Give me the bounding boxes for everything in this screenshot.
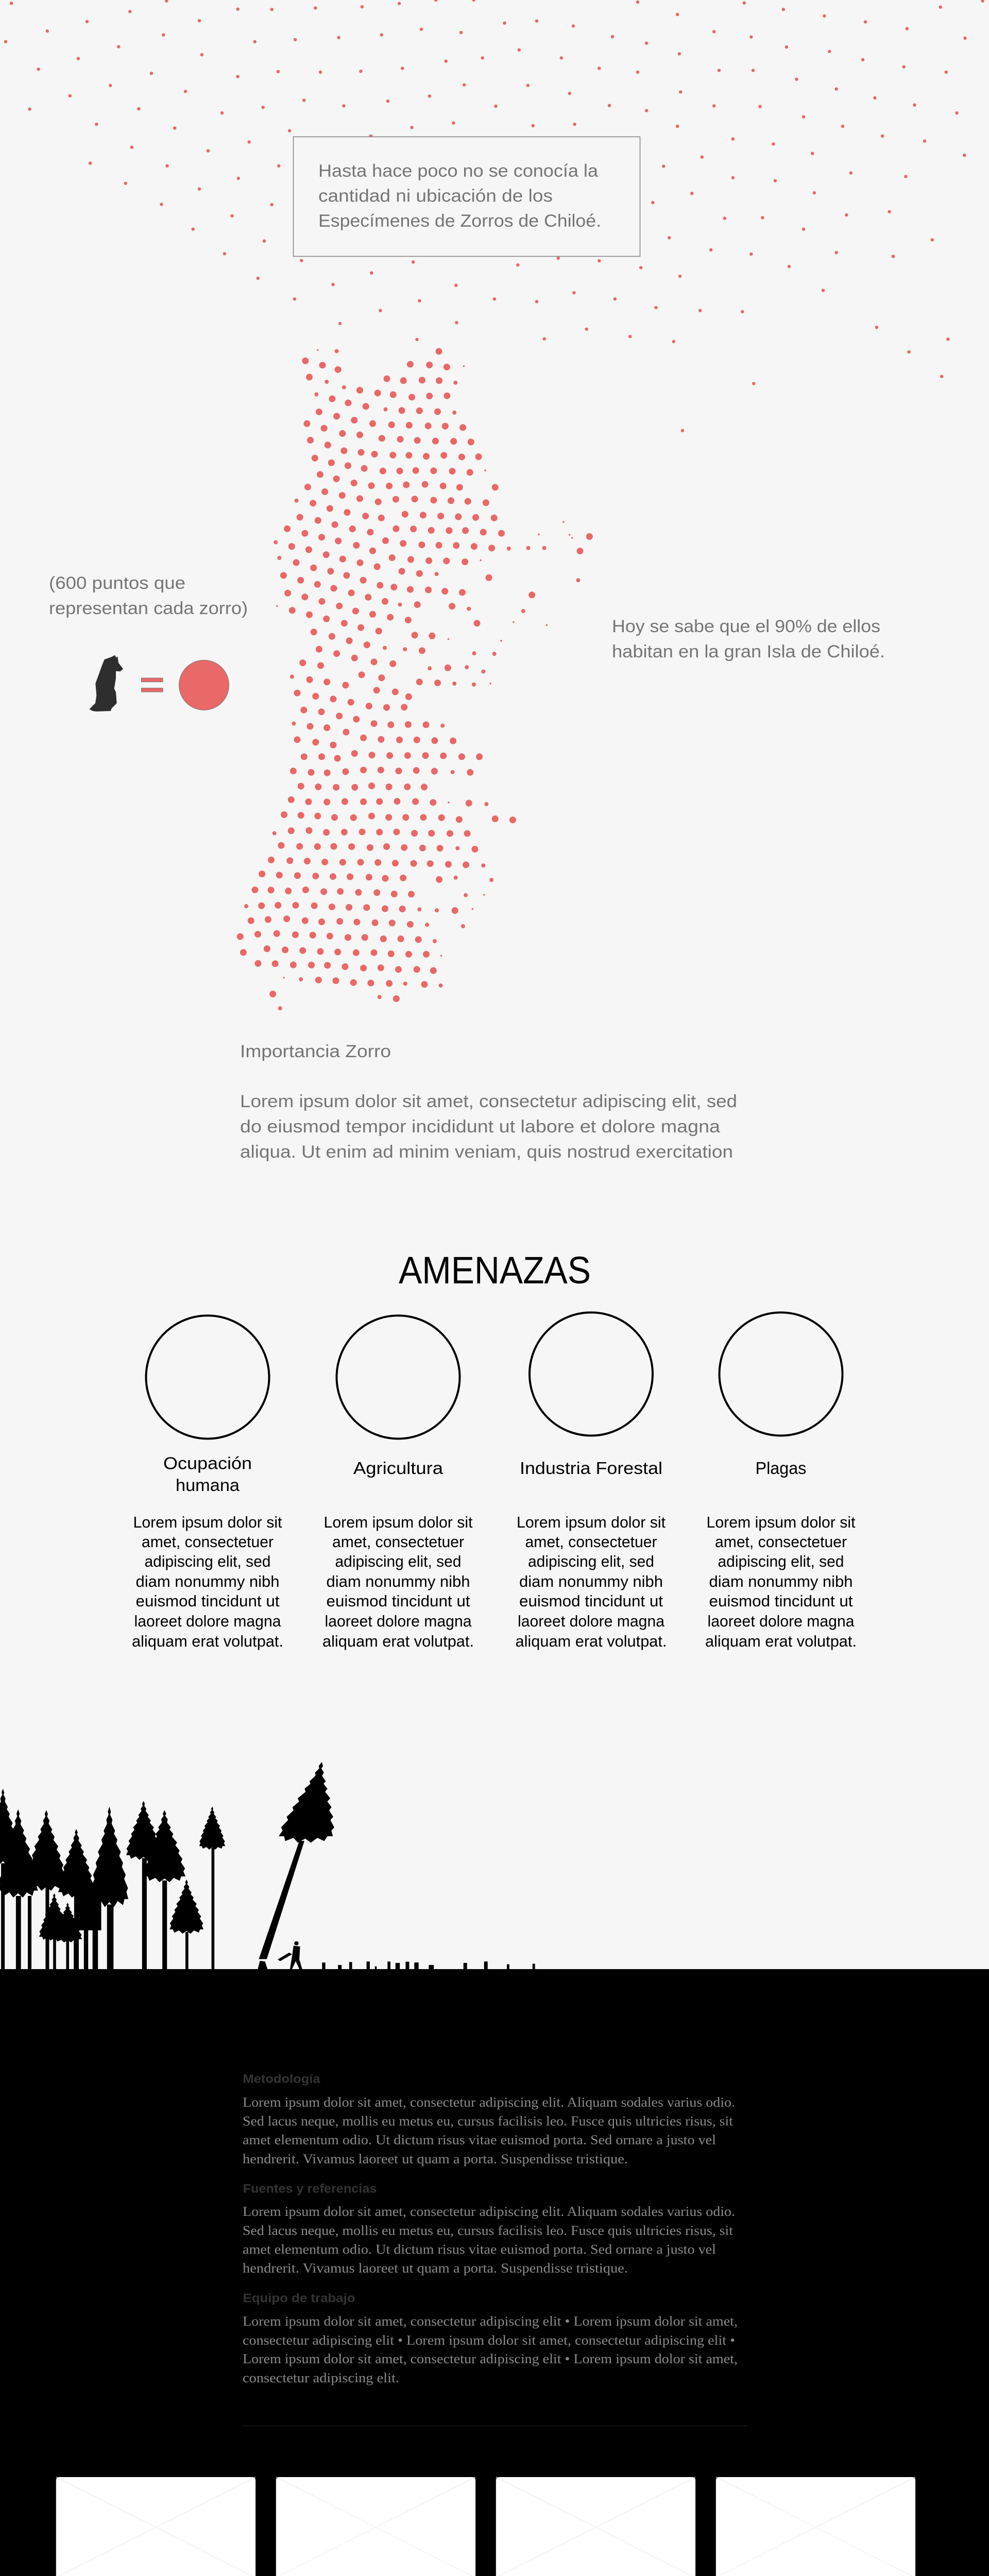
threat: agriculture: diam nonummy nibh	[327, 1572, 470, 1590]
section: team: Lorem ipsum dolor sit amet, consectetur adipiscing elit • Lorem ipsum dolor sit amet,	[243, 2314, 738, 2329]
threat: agriculture: aliquam erat volutpat.	[322, 1632, 474, 1650]
threat: forestry: amet, consectetuer	[525, 1533, 657, 1551]
icon: red dot	[179, 660, 229, 710]
section: team: consectetur adipiscing elit.	[243, 2370, 399, 2385]
callout: intro text box: Hasta hace poco no se conocía la	[318, 161, 598, 181]
threat: human occupation: adipiscing elit, sed	[144, 1552, 271, 1570]
heading: threats: AMENAZAS	[399, 1249, 591, 1292]
threat: human occupation: diam nonummy nibh	[136, 1572, 279, 1590]
threat: agriculture: adipiscing elit, sed	[335, 1552, 462, 1570]
threat: human occupation: Ocupación	[163, 1454, 252, 1472]
map: dot map of Chiloé island, north half	[276, 350, 589, 671]
threat: pests: Plagas	[755, 1459, 807, 1478]
threat: pests: diam nonummy nibh	[709, 1572, 853, 1590]
section: team: consectetur adipiscing elit • Lorem ipsum dolor sit amet, consectetur adipiscing elit •	[243, 2333, 735, 2348]
legend caption: representan cada zorro)	[49, 599, 248, 618]
threat: agriculture: Agricultura	[353, 1459, 444, 1478]
threat: forestry: euismod tincidunt ut	[519, 1592, 663, 1610]
threat: forestry: Lorem ipsum dolor sit	[517, 1513, 666, 1531]
threat: pests: Lorem ipsum dolor sit	[707, 1513, 856, 1531]
section: sources	[243, 2182, 735, 2276]
threat: human occupation	[132, 1316, 283, 1650]
section: sources: hendrerit. Vivamus laoreet ut quam a porta. Suspendisse tristique.	[243, 2261, 628, 2276]
section: team	[243, 2292, 738, 2385]
threat: agriculture	[322, 1316, 474, 1650]
threat: agriculture: euismod tincidunt ut	[327, 1592, 470, 1610]
section: methodology: Lorem ipsum dolor sit amet, consectetur adipiscing elit. Aliquam sodales varius odio.	[243, 2095, 735, 2110]
threat: human occupation: euismod tincidunt ut	[136, 1592, 280, 1610]
section: methodology: amet elementum odio. Ut dictum risus vitae euismod porta. Sed ornare a justo vel	[243, 2132, 716, 2147]
threat: pests: aliquam erat volutpat.	[705, 1632, 857, 1650]
text: island statistic: Hoy se sabe que el 90% de ellos	[612, 617, 880, 636]
text: island statistic	[612, 617, 885, 662]
illustration: forest, falling tree, logger and stumps	[0, 1762, 535, 1969]
threat: pests: adipiscing elit, sed	[718, 1552, 844, 1570]
threat: pests	[705, 1313, 857, 1650]
text: fox importance: do eiusmod tempor incididunt ut labore et dolore magna	[240, 1117, 720, 1137]
section: team: Lorem ipsum dolor sit amet, consectetur adipiscing elit • Lorem ipsum dolor sit amet,	[243, 2351, 738, 2366]
threat: forestry: aliquam erat volutpat.	[515, 1632, 667, 1650]
icon: equals sign	[141, 678, 163, 692]
standing trees	[0, 1789, 225, 1969]
threat: pests: amet, consectetuer	[715, 1533, 847, 1551]
legend caption: (600 puntos que	[49, 573, 185, 593]
threat: human occupation: Lorem ipsum dolor sit	[133, 1513, 282, 1531]
threat: human occupation: amet, consectetuer	[142, 1533, 274, 1551]
threat: forestry: diam nonummy nibh	[519, 1572, 663, 1590]
section: methodology: Metodología	[243, 2072, 320, 2086]
scattered dots: foxes on the mainland	[6, 0, 983, 431]
threat: human occupation: humana	[176, 1476, 240, 1495]
threat: agriculture: laoreet dolore magna	[325, 1612, 472, 1630]
callout: intro text box: Especímenes de Zorros de Chiloé.	[318, 211, 601, 231]
section: team: Equipo de trabajo	[243, 2292, 355, 2305]
card: species 3	[496, 2477, 696, 2576]
section: methodology: hendrerit. Vivamus laoreet ut quam a porta. Suspendisse tristique.	[243, 2151, 628, 2166]
callout: intro text box	[294, 137, 640, 257]
threat: human occupation: laoreet dolore magna	[134, 1612, 281, 1630]
threat: agriculture: Lorem ipsum dolor sit	[323, 1513, 473, 1531]
callout: intro text box: cantidad ni ubicación de los	[318, 187, 553, 206]
threat: pests: euismod tincidunt ut	[709, 1592, 853, 1610]
threat: human occupation: aliquam erat volutpat.	[132, 1632, 283, 1650]
logger with chainsaw	[278, 1941, 302, 1969]
text: island statistic: habitan en la gran Isla de Chiloé.	[612, 642, 885, 662]
threat: agriculture: amet, consectetuer	[332, 1533, 464, 1551]
tree stumps	[322, 1961, 535, 1969]
text: fox importance: Lorem ipsum dolor sit amet, consectetur adipiscing elit, sed	[240, 1092, 737, 1111]
text: fox importance: aliqua. Ut enim ad minim veniam, quis nostrud exercitation	[240, 1142, 733, 1162]
legend caption	[49, 573, 248, 618]
legend: one dot equals one fox	[49, 573, 248, 711]
threat: forestry	[515, 1313, 667, 1650]
section: sources: Lorem ipsum dolor sit amet, consectetur adipiscing elit. Aliquam sodales varius odio.	[243, 2204, 735, 2219]
text: fox importance	[240, 1042, 737, 1162]
threat: forestry: adipiscing elit, sed	[528, 1552, 654, 1570]
card: species 4	[715, 2477, 916, 2576]
text: fox importance: Importancia Zorro	[240, 1042, 391, 1061]
section: sources: Sed lacus neque, mollis eu metus eu, cursus facilisis leo. Fusce quis ultricies risus, sit	[243, 2223, 734, 2238]
icon: sitting fox silhouette	[89, 655, 123, 711]
section: methodology: Sed lacus neque, mollis eu metus eu, cursus facilisis leo. Fusce quis ultricies risus, sit	[243, 2113, 734, 2129]
footer: black panel	[0, 1969, 989, 2576]
card: species 2	[275, 2477, 476, 2576]
section: sources: amet elementum odio. Ut dictum risus vitae euismod porta. Sed ornare a justo vel	[243, 2242, 716, 2257]
map: dot map of Chiloé island, south half	[240, 675, 513, 1008]
threat: forestry: laoreet dolore magna	[518, 1612, 665, 1630]
falling tree	[258, 1762, 349, 1969]
card: species 1	[56, 2477, 256, 2576]
threat: forestry: Industria Forestal	[520, 1459, 662, 1478]
section: methodology	[243, 2072, 735, 2166]
section: sources: Fuentes y referencias	[243, 2182, 377, 2196]
threat: pests: laoreet dolore magna	[708, 1612, 855, 1630]
